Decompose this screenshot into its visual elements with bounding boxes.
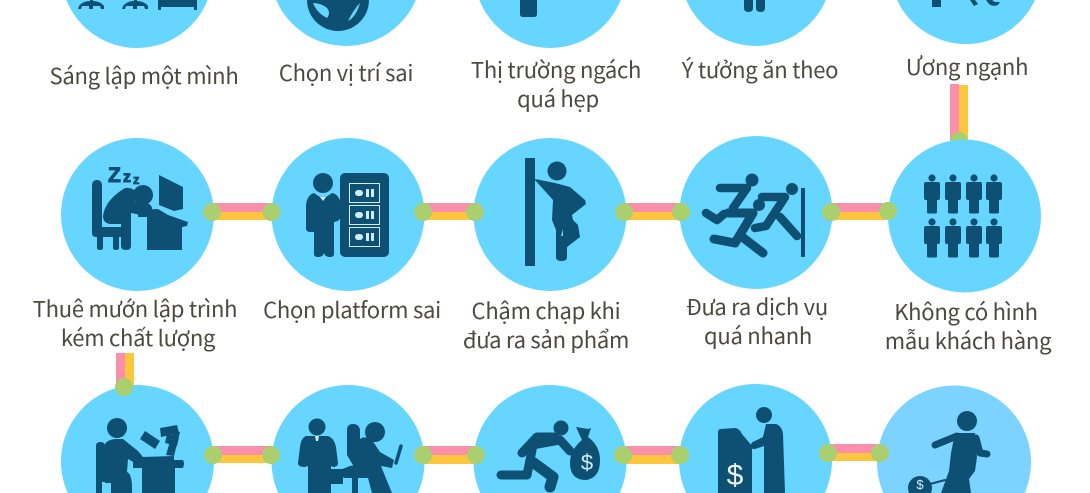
icon: person at cash machine: $ <box>727 459 744 492</box>
icon: man and server cabinet <box>306 173 389 257</box>
panel: sáng lập một mình <box>50 0 238 91</box>
panel: bottom row third circle <box>474 385 626 493</box>
icon: leg <box>520 0 537 17</box>
connector: row one to row two <box>950 84 968 150</box>
label: kém chất lượng <box>61 321 216 353</box>
connector joints <box>115 202 897 464</box>
icon: programmer asleep at desk <box>92 164 188 250</box>
circle <box>680 136 832 289</box>
icon: globe <box>307 0 369 31</box>
circle <box>474 385 626 493</box>
circle <box>897 0 1035 44</box>
panel: chọn vị trí sai <box>276 0 416 88</box>
label: mẫu khách hàng <box>885 324 1052 356</box>
icon: man leaning on wall <box>525 158 586 266</box>
circle <box>272 138 424 291</box>
label: quá hẹp <box>517 82 599 114</box>
label: Chọn platform sai <box>263 293 441 325</box>
panel: bottom row fifth circle <box>877 385 1031 493</box>
icon: man dragging money bag <box>908 411 987 493</box>
icon: man dragging money bag: $ <box>916 477 924 492</box>
circle <box>877 385 1031 493</box>
icon: programmer asleep at desk: z <box>133 172 140 187</box>
label: Ương ngạnh <box>906 50 1028 82</box>
icon: programmer asleep at desk: Z <box>108 164 121 187</box>
panel: bottom row fourth circle <box>679 384 832 493</box>
circle <box>686 0 826 46</box>
icon: overwhelmed worker at desk <box>96 418 184 493</box>
circle <box>272 385 424 493</box>
panel: ương ngạnh <box>897 0 1035 82</box>
circle <box>679 384 832 493</box>
icon: person at cash machine <box>718 407 785 493</box>
label: Chậm chạp khi <box>472 294 620 326</box>
circle <box>61 385 214 493</box>
panel: thuê mướn lập trình kém chất lượng <box>33 138 237 353</box>
icon: feet <box>932 0 1000 7</box>
label: Sáng lập một mình <box>50 59 238 91</box>
panel: chọn platform sai <box>263 138 441 325</box>
circle <box>66 0 208 48</box>
panel: ý tưởng ăn theo <box>681 0 838 85</box>
icon: man running with money bag: $ <box>581 450 593 475</box>
label: Thị trường ngách <box>471 53 641 85</box>
circle <box>888 140 1041 292</box>
label: Chọn vị trí sai <box>279 56 413 88</box>
panel: đưa ra dịch vụ quá nhanh <box>680 136 832 351</box>
icon: man running with money bag <box>501 420 600 487</box>
connector: row two to row three <box>116 353 134 386</box>
label: đưa ra sản phẩm <box>463 323 629 355</box>
circle <box>479 0 621 48</box>
icon: businessman and seated traveller <box>298 418 401 493</box>
panel: bottom row second circle <box>272 385 424 493</box>
panel: không có hình mẫu khách hàng <box>885 140 1052 356</box>
label: Thuê mướn lập trình <box>33 292 237 324</box>
icon: runners <box>706 174 805 257</box>
panel: chậm chạp khi đưa ra sản phẩm <box>463 138 629 355</box>
circle <box>61 138 214 291</box>
circle <box>474 138 626 291</box>
icon: chairs and bed <box>78 0 197 10</box>
icon: eight people <box>924 174 1002 258</box>
label: Đưa ra dịch vụ <box>686 290 828 322</box>
connectors: row two <box>212 203 888 220</box>
label: Không có hình <box>894 295 1038 327</box>
panel: thị trường ngách quá hẹp <box>471 0 641 114</box>
panel: bottom row first circle <box>61 385 214 493</box>
label: Ý tưởng ăn theo <box>681 53 838 85</box>
icon: programmer asleep at desk: z <box>123 169 131 186</box>
label: quá nhanh <box>704 319 812 351</box>
icon: legs <box>744 0 765 12</box>
connectors: row three <box>213 444 880 464</box>
circle <box>276 0 416 46</box>
